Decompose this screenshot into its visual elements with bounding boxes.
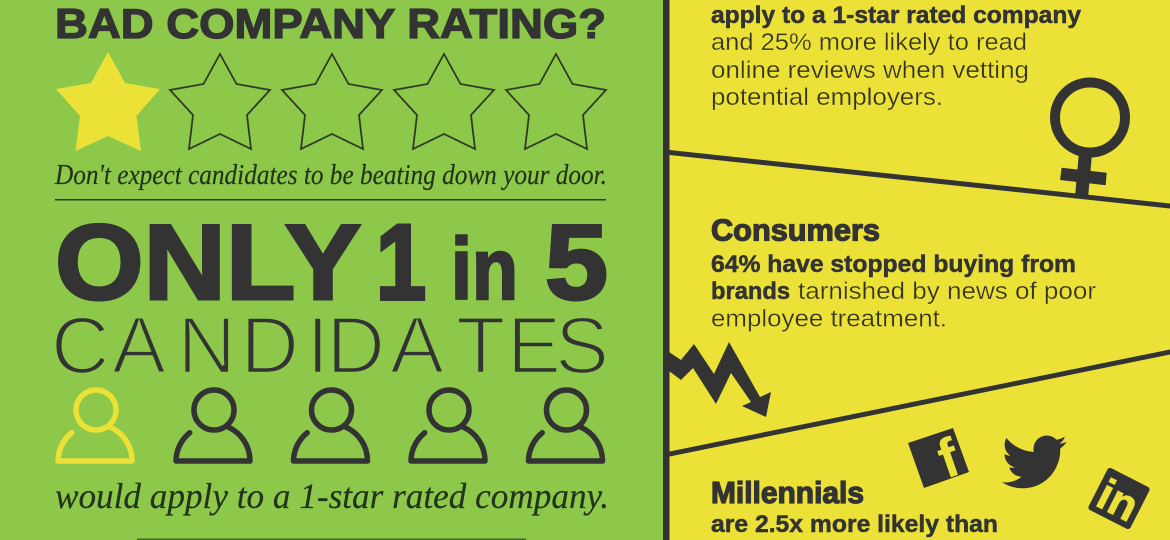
icon: person 5	[528, 390, 603, 461]
text: women statistic: and 25% more likely to read	[711, 29, 1027, 56]
text: consumers statistic: employee treatment.	[711, 306, 947, 332]
text: women statistic: apply to a 1-star rated company	[711, 2, 1082, 29]
icon: person 4	[411, 390, 485, 461]
icon: person 2	[176, 390, 250, 461]
headline: only 1 in 5: 1	[376, 202, 426, 322]
icon: facebook: f	[930, 425, 968, 490]
script caption: would apply to a 1-star rated company.	[55, 476, 609, 516]
headline: only 1 in 5: ONLY	[55, 202, 361, 322]
icon: empty star 4	[394, 54, 494, 149]
text: consumers statistic	[711, 212, 1096, 332]
script tagline: Don't expect candidates to be beating down your door.	[54, 159, 607, 191]
icon: empty star 5	[506, 54, 606, 149]
icon: person 3	[294, 390, 368, 461]
text: consumers statistic: tarnished by news of poor	[798, 278, 1096, 305]
headline: only 1 in 5	[55, 202, 608, 322]
text: women statistic: online reviews when vetting	[711, 57, 1029, 84]
heading: consumers: Consumers	[711, 212, 880, 248]
text: women statistic	[711, 2, 1082, 111]
text: consumers statistic: brands	[711, 278, 790, 305]
headline: candidates: CANDIDATES	[51, 301, 609, 391]
heading: millennials: Millennials	[711, 475, 864, 510]
icon: filled star	[56, 52, 160, 151]
icon: linkedin: in	[1089, 470, 1146, 531]
icon: highlighted person	[58, 390, 132, 461]
icon: female symbol	[1055, 82, 1125, 198]
icon: twitter bird	[1002, 436, 1067, 488]
people row: one of five	[58, 390, 603, 461]
headline: only 1 in 5: in	[451, 221, 518, 318]
text: women statistic: potential employers.	[711, 84, 943, 111]
headline: only 1 in 5: 5	[545, 202, 608, 322]
icon: falling zigzag arrow	[669, 342, 771, 417]
text: millennials statistic: are 2.5x more likely than	[711, 511, 998, 538]
star rating: one of five	[56, 52, 606, 151]
icon: empty star 2	[170, 54, 270, 149]
icon: facebook	[908, 425, 969, 490]
text: consumers statistic: 64% have stopped buying from	[711, 251, 1076, 278]
text: millennials statistic	[711, 475, 998, 538]
panel: audience statistics	[669, 0, 1170, 540]
panel: bad company rating	[0, 0, 663, 540]
title: BAD COMPANY RATING?	[55, 0, 606, 47]
icon: empty star 3	[282, 54, 382, 149]
